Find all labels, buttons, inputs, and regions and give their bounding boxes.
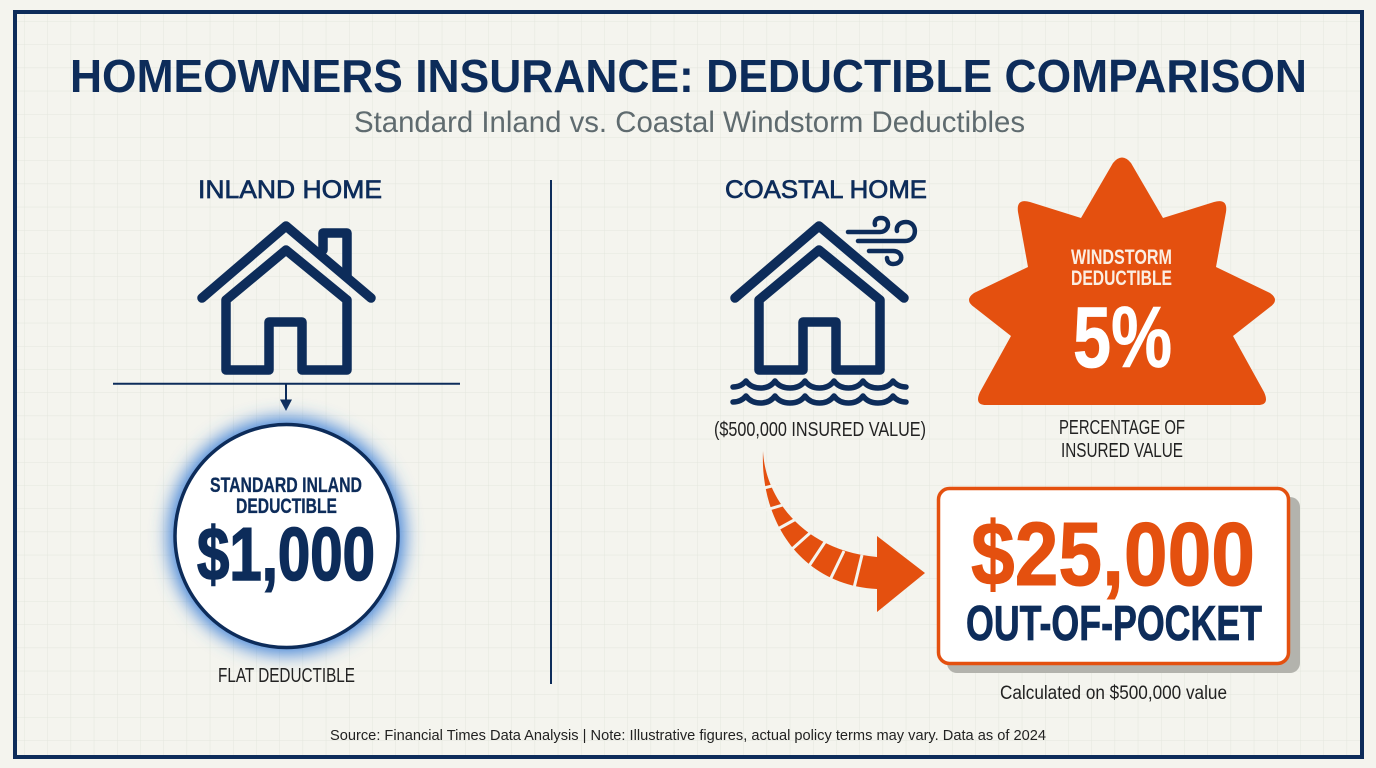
flat deductible caption: FLAT DEDUCTIBLE	[218, 665, 355, 687]
out-of-pocket callout	[938, 488, 1300, 673]
calculation caption: Calculated on $500,000 value	[1000, 683, 1227, 704]
icon: waves	[733, 381, 906, 403]
title: HOMEOWNERS INSURANCE: DEDUCTIBLE COMPARISON	[70, 50, 1307, 102]
percentage caption: INSURED VALUE	[1061, 440, 1183, 462]
icon: coastal house	[735, 226, 904, 370]
icon: inland house	[202, 226, 371, 370]
panel: inland home	[113, 176, 460, 687]
windstorm badge	[969, 158, 1275, 405]
badge label line two: DEDUCTIBLE	[1071, 267, 1172, 290]
callout label: OUT-OF-POCKET	[966, 597, 1262, 651]
badge percentage: 5%	[1073, 290, 1172, 386]
deductible circle	[168, 418, 404, 654]
percentage caption	[1059, 417, 1185, 462]
deductible amount: $1,000	[197, 512, 375, 596]
subtitle: Standard Inland vs. Coastal Windstorm Deductibles	[354, 106, 1025, 139]
circle label: STANDARD INLAND	[210, 474, 362, 497]
percentage caption: PERCENTAGE OF	[1059, 417, 1185, 439]
ground line	[113, 383, 460, 385]
arrow: curved to out-of-pocket	[760, 451, 925, 612]
icon: wind	[848, 218, 915, 264]
badge label: WINDSTORM	[1071, 246, 1172, 269]
arrow: house to deductible	[280, 384, 292, 411]
panel: coastal home	[714, 158, 1300, 704]
inland heading: INLAND HOME	[198, 176, 382, 204]
source note: Source: Financial Times Data Analysis | Note: Illustrative figures, actual policy terms may vary. Data as of 2024	[330, 728, 1046, 744]
callout amount: $25,000	[971, 505, 1255, 605]
insured value caption: ($500,000 INSURED VALUE)	[714, 419, 926, 441]
center divider	[550, 180, 552, 684]
coastal heading: COASTAL HOME	[725, 176, 927, 204]
circle label line two: DEDUCTIBLE	[236, 495, 337, 518]
